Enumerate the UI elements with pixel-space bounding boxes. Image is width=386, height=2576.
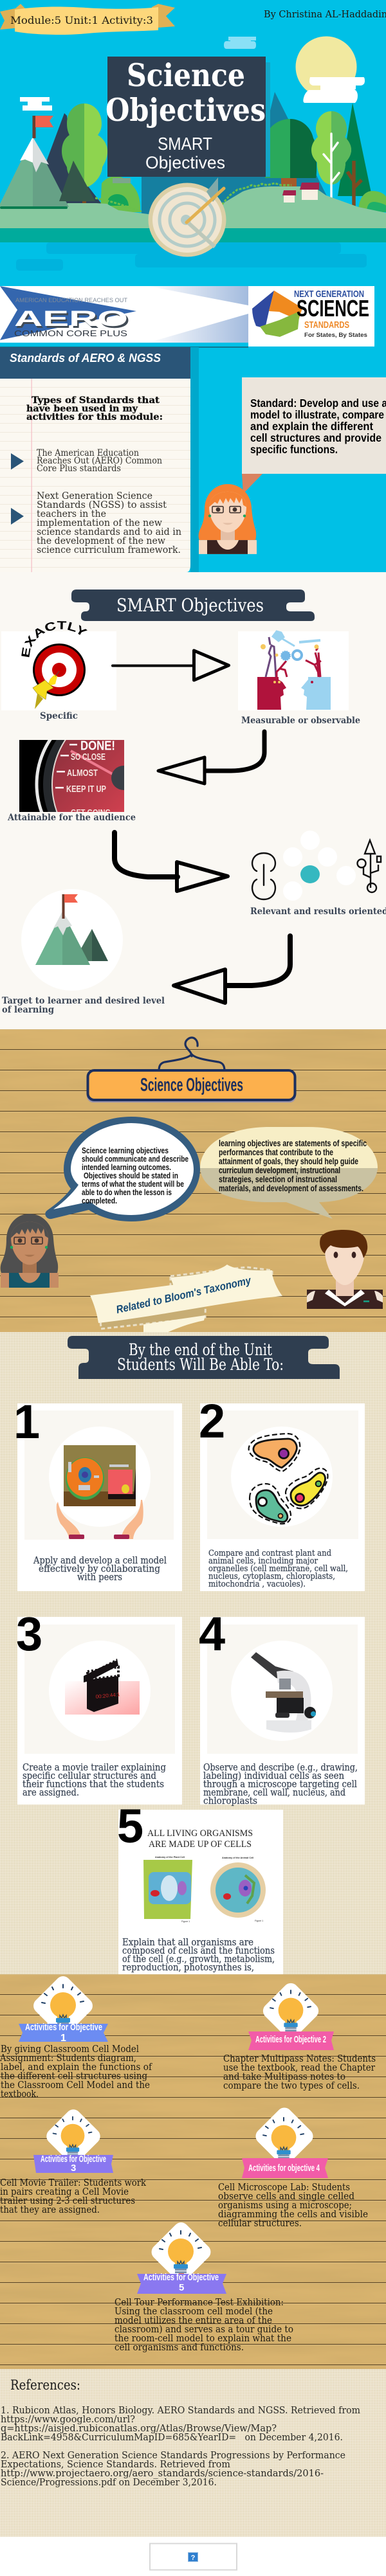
panel: title board	[106, 57, 270, 177]
callout: standard statement: and explain the different	[250, 420, 373, 433]
activity 5: Activities for Objective	[143, 2272, 219, 2283]
sign: science objectives: Science Objectives	[140, 1075, 243, 1095]
icon: specific target	[1, 621, 116, 710]
image: animal cell	[210, 1857, 266, 1922]
section: unit outcomes	[0, 1332, 386, 1974]
text: objective 1: effectively by collaborating	[39, 1564, 160, 1574]
number 2: 2	[199, 1394, 225, 1448]
card: objective 3	[16, 1607, 182, 1805]
reference list	[1, 2404, 360, 2488]
subtitle: SMART Objectives: Objectives	[145, 153, 225, 172]
activity 4: diagramming the cells and visible	[218, 2208, 368, 2220]
icon: teacher with dark hair	[1, 1214, 59, 1288]
activity 3: that they are assigned.	[0, 2204, 100, 2215]
image: attainable gauge: KEEP IT UP	[66, 784, 106, 795]
subtitle: SMART Objectives: SMART	[158, 134, 212, 154]
callout: definition speech bubble	[200, 1127, 378, 1219]
icon: relevant links and circles	[252, 831, 381, 901]
callout: objectives speech bubble: Science learning objectives	[82, 1146, 169, 1155]
banner: module label	[0, 4, 175, 35]
image: plant cell	[143, 1856, 192, 1923]
arrow: measurable to attainable	[158, 732, 264, 784]
title: Science Objectives	[106, 57, 266, 129]
icon: ground	[0, 186, 386, 228]
heading: by the end of the unit	[68, 1336, 340, 1379]
activity 1	[0, 1973, 152, 2100]
logo: AERO: AERO	[14, 307, 128, 331]
icon: bullet triangle	[11, 508, 24, 525]
icon: cells	[249, 1434, 328, 1524]
activity 1: textbook.	[1, 2088, 39, 2100]
text: objective 4: Observe and describe (e.g., drawing,	[203, 1763, 358, 1773]
text: NGSS: science standards and to aid in	[37, 526, 181, 537]
activity 1: 1	[60, 2033, 66, 2044]
icon: bullet triangle	[11, 453, 24, 469]
image: plant cell: Anatomy of the Plant Cell	[155, 1856, 185, 1859]
section: science objectives wood board	[0, 1029, 386, 1347]
number 3: 3	[16, 1607, 42, 1661]
text: AERO standards: The American Education	[37, 448, 139, 458]
image: attainable gauge: SO CLOSE	[71, 752, 106, 762]
text: objective 2: animal cells, including major	[208, 1556, 318, 1566]
text: objective 4: labeling) individual cells as seen	[203, 1771, 344, 1781]
callout: objectives speech bubble: intended learning outcomes.	[82, 1163, 171, 1172]
label: target: of learning	[2, 1005, 54, 1015]
activity 4	[218, 2105, 368, 2229]
activity 5: Cell Tour Performance Test Exhibition:	[115, 2296, 284, 2308]
activity 4: organisms using a microscope;	[218, 2199, 352, 2211]
icon: water reflections	[16, 242, 367, 271]
image: attainable gauge: DONE!	[80, 739, 115, 753]
activity 1: By giving Classroom Cell Model	[1, 2043, 139, 2055]
icon: measurable teamwork	[238, 631, 349, 710]
icon: sun	[296, 36, 356, 98]
logo: AERO	[0, 286, 248, 343]
text: AERO standards	[37, 448, 162, 474]
callout: standard statement: specific functions.	[250, 443, 338, 456]
heading: types of standards: Types of Standards that	[32, 395, 160, 406]
heading: SMART Objectives: SMART Objectives	[116, 595, 264, 616]
text: objective 2: organelles (cell membrane, cell wall,	[208, 1564, 348, 1574]
image: attainable gauge: GET GOING	[71, 807, 111, 817]
text: objective 1: with peers	[77, 1572, 122, 1583]
card: objective 4	[199, 1607, 365, 1806]
activity 3: 3	[71, 2163, 76, 2174]
callout: objectives speech bubble: Objectives should be stated in	[84, 1171, 178, 1180]
arrow: specific to measurable	[113, 651, 229, 680]
text: objective 4	[203, 1763, 358, 1806]
reference list: q=https://aisjed.rubiconatlas.org/Atlas/Browse/View/Map?	[1, 2422, 277, 2434]
callout: definition speech bubble: curriculum development, instructional	[219, 1166, 340, 1175]
section: SMART objectives	[0, 572, 386, 1029]
label: target: Target to learner and desired level	[2, 996, 165, 1006]
text: NGSS	[37, 490, 181, 555]
heading bar: standards of AERO and NGSS	[0, 347, 190, 379]
text: objective 5: Explain that all organisms are	[122, 1938, 253, 1948]
icon: teacher man	[307, 1230, 383, 1309]
reference list: 1. Rubicon Atlas, Honors Biology. AERO Standards and NGSS. Retrieved from	[1, 2404, 360, 2416]
card: objective 5	[117, 1799, 283, 1974]
activity 1: the Classroom Cell Model and the	[1, 2079, 150, 2091]
reference list: 2. AERO Next Generation Science Standards Progressions by Performance	[1, 2449, 345, 2461]
callout: objectives speech bubble	[45, 1117, 200, 1221]
image: cell model	[64, 1445, 136, 1506]
arrow: relevant to target	[174, 936, 290, 1003]
icon: ground bushes	[100, 176, 386, 212]
activity 3	[0, 2106, 147, 2215]
card: objective 1	[14, 1395, 182, 1591]
icon: specific target: EXACTLY	[21, 621, 87, 657]
icon: houses	[282, 183, 319, 203]
logo: AERO: AERO	[15, 309, 130, 333]
callout: standard statement	[242, 377, 386, 494]
image: clapperboard	[65, 1657, 140, 1715]
icon: mountain target	[21, 889, 123, 991]
heading: types of standards: activities for this module:	[26, 412, 163, 422]
activity 1: Assignment: Students diagram,	[0, 2052, 136, 2064]
image: plant cell: Figure 1	[181, 1920, 190, 1923]
number 5: 5	[117, 1799, 143, 1853]
activity 3: Cell Movie Trailer: Students work	[0, 2177, 147, 2188]
reference list: BackLink=4958&CurriculumMapID=685&YearID= on December 4,2016.	[1, 2431, 343, 2443]
activity 5: 5	[179, 2282, 184, 2293]
image heading: all living organisms	[147, 1828, 253, 1850]
activity 3: trailer using 2-3 cell structures	[0, 2195, 135, 2206]
activity 5	[115, 2219, 293, 2353]
title: Science Objectives: Objectives	[106, 91, 266, 129]
text: objective 3	[23, 1763, 166, 1798]
image heading: all living organisms: ALL LIVING ORGANISMS	[147, 1828, 253, 1839]
number 1: 1	[14, 1395, 40, 1448]
text: objective 1	[33, 1556, 167, 1583]
text: objective 5: of the cell (e.g., growth, metabolism,	[122, 1954, 275, 1965]
activity 5: Using the classroom cell model (the	[115, 2305, 273, 2317]
reference list: Science/Progressions.pdf on December 3,2016.	[1, 2476, 217, 2488]
icon: hanger	[159, 1038, 225, 1071]
section: activities wood board	[0, 1973, 386, 2369]
subtitle: SMART Objectives	[145, 134, 225, 172]
callout: objectives speech bubble: able to do when the lesson is	[82, 1188, 172, 1197]
callout: definition speech bubble: performances that contribute to the	[219, 1148, 333, 1157]
icon: grass edge	[95, 183, 291, 212]
icon: teal band	[0, 228, 386, 242]
text: objective 4: membrane, cell wall, nucleus, and	[203, 1788, 345, 1798]
text: objective 3: Create a movie trailer explaining	[23, 1763, 166, 1773]
banner: module label: Module:5 Unit:1 Activity:3	[10, 14, 153, 26]
text: objective 2: nucleus, cytoplasm, chloroplasts,	[208, 1572, 335, 1581]
heading: types of standards	[26, 395, 163, 422]
text: objective 4: through a microscope targeting cell	[203, 1779, 357, 1790]
heading: by the end of the unit: Students Will Be Able To:	[117, 1355, 284, 1374]
image: attainable gauge	[19, 740, 124, 812]
sign: science objectives	[87, 1070, 296, 1103]
footer badge	[150, 2543, 237, 2570]
text: objective 5	[122, 1938, 275, 1973]
text: objective 3: are assigned.	[23, 1788, 79, 1798]
label: target	[2, 996, 165, 1015]
ribbon: related to Bloom's taxonomy	[90, 1265, 282, 1347]
label: specific: Specific	[40, 711, 78, 721]
activity 2: and take Multipass notes to	[223, 2071, 345, 2082]
text: AERO standards: Reaches Out (AERO) Common	[37, 456, 162, 466]
text: NGSS: implementation of the new	[37, 517, 162, 528]
callout: objectives speech bubble: completed.	[82, 1196, 117, 1205]
text: objective 2: mitochondria , vacuoles).	[208, 1580, 306, 1589]
activity 5: the room-cell model to explain what the	[115, 2332, 291, 2344]
activity 4: Cell Microscope Lab: Students	[218, 2181, 350, 2193]
icon: clouds	[20, 37, 256, 111]
footer badge: ?	[191, 2554, 196, 2562]
panel: standards section	[0, 347, 386, 572]
icon: teacher with orange hair	[199, 484, 257, 554]
activity 1: label, and explain the functions of	[1, 2061, 152, 2073]
activity 3: Activities for Objective	[41, 2154, 106, 2165]
text: objective 4: chloroplasts	[203, 1796, 257, 1806]
icon: background hills	[44, 92, 372, 214]
text: objective 5: reproduction, photosynthes is,	[122, 1963, 254, 1973]
logo: Next Generation Science Standards: STANDARDS	[304, 320, 349, 330]
logo: Next Generation Science Standards: For States, By States	[304, 332, 367, 339]
heading: types of standards: have been used in my	[26, 404, 138, 414]
text: objective 1: Apply and develop a cell model	[33, 1556, 167, 1566]
callout: definition speech bubble: strategies, selection of instructional	[219, 1175, 337, 1184]
text: NGSS: science curriculum framework.	[37, 544, 181, 555]
logo: AERO: COMMON CORE PLUS	[14, 329, 127, 338]
text: objective 2: Compare and contrast plant and	[208, 1549, 331, 1558]
activity 3: in pairs creating a Cell Movie	[0, 2186, 129, 2197]
image: attainable gauge: ALMOST	[67, 768, 98, 779]
title: Science Objectives: Science	[127, 57, 245, 94]
image: microscope	[251, 1652, 316, 1733]
label: measurable: Measurable or observable	[241, 716, 360, 726]
text: NGSS: Standards (NGSS) to assist	[37, 499, 167, 510]
image: animal cell: Anatomy of the Animal Cell	[222, 1857, 253, 1859]
callout: objectives speech bubble: should communicate and describe	[82, 1155, 188, 1164]
logo: AERO: AMERICAN EDUCATION REACHES OUT	[15, 297, 128, 303]
icon: hands	[57, 1500, 143, 1539]
activity 1: the different cell structures using	[1, 2070, 147, 2082]
hero section	[0, 0, 386, 347]
activity 2	[223, 1980, 376, 2091]
text: NGSS: the development of the new	[37, 535, 165, 546]
logo: Next Generation Science Standards: NEXT GENERATION	[294, 289, 364, 300]
activity 5: classroom) and serves as a tour guide to	[115, 2323, 293, 2335]
heading: by the end of the unit: By the end of the Unit	[129, 1340, 272, 1359]
icon: sun cloud	[303, 77, 365, 103]
text: AERO standards: Core Plus standards	[37, 464, 121, 474]
image heading: all living organisms: ARE MADE UP OF CELLS	[149, 1839, 252, 1850]
text: objective 3: their functions that the students	[23, 1779, 164, 1790]
icon: archery target	[148, 177, 226, 257]
panel: notebook	[0, 347, 190, 572]
activity 1: Activities for Objective	[25, 2022, 102, 2033]
card: objective 2	[199, 1394, 365, 1591]
text: NGSS: teachers in the	[37, 508, 106, 519]
image: clapperboard: 00:20:44:1	[95, 1691, 120, 1700]
text: objective 3: specific cellular structures and	[23, 1771, 156, 1781]
heading bar: standards of AERO and NGSS: Standards of AERO & NGSS	[10, 352, 161, 365]
activity 5: cell organisms and functions.	[115, 2341, 244, 2353]
activity 2: Activities for Objective 2	[255, 2034, 326, 2045]
text: objective 5: composed of cells and the functions	[122, 1946, 275, 1956]
reference list: https://www.google.com/url?	[1, 2413, 135, 2425]
activity 4: cellular structures.	[218, 2217, 302, 2229]
image: animal cell: Figure 1	[255, 1920, 263, 1922]
text: objective 2	[208, 1549, 348, 1589]
label: attainable: Attainable for the audience	[7, 813, 136, 823]
section: references	[0, 2369, 386, 2537]
ribbon: related to Bloom's taxonomy: Related to Bloom's Taxonomy	[115, 1274, 253, 1316]
icon: trees	[59, 104, 362, 212]
text: NGSS: Next Generation Science	[37, 490, 152, 501]
reference list: Expectations, Science Standards. Retrieved from	[1, 2458, 230, 2470]
activity 4: observe cells and single celled	[218, 2190, 354, 2202]
activity 5: model utilizes the entire area of the	[115, 2314, 272, 2326]
heading: references: References:	[10, 2377, 80, 2393]
reference list: http://www.projectaero.org/aero_standards/science-standards/2016-	[1, 2467, 324, 2479]
number 4: 4	[199, 1607, 225, 1661]
arrow: attainable to relevant	[115, 833, 228, 891]
callout: objectives speech bubble: terms of what the student will be	[82, 1180, 184, 1189]
logo: Next Generation Science Standards	[248, 286, 374, 347]
icon: summit mountain	[0, 116, 95, 209]
heading: SMART Objectives	[71, 590, 315, 621]
activity 4: Activities for objective 4	[248, 2163, 320, 2174]
activity 2: compare the two types of cells.	[223, 2080, 360, 2091]
